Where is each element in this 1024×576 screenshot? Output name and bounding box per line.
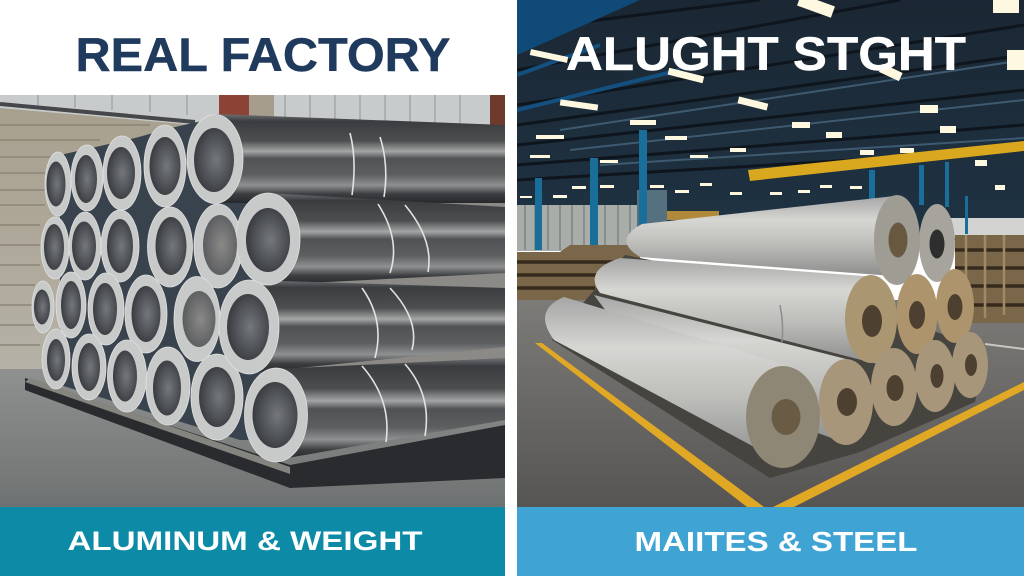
- banner: aluminum and weight: [0, 507, 505, 576]
- columns: [535, 130, 968, 250]
- pipe ends: [32, 114, 308, 462]
- heading: real factory: REAL FACTORY: [76, 28, 450, 81]
- photo: warehouse with rolled metal: [517, 0, 1024, 507]
- pallet base: [25, 378, 505, 488]
- pipe bodies: [215, 114, 505, 460]
- heading: alught stght: ALUGHT STGHT: [566, 27, 966, 80]
- banner: maiites and steel: MAIITES & STEEL: [634, 526, 918, 557]
- panel: alught stght: [517, 0, 1024, 576]
- banner: aluminum and weight: ALUMINUM & WEIGHT: [68, 526, 423, 556]
- dark mass behind pipe ends: [60, 122, 264, 440]
- roll bodies: [626, 196, 894, 276]
- banner: maiites and steel: [517, 507, 1024, 576]
- pallets: [517, 235, 1024, 323]
- floor shadow under rolls: [552, 255, 985, 478]
- ceiling lights: [520, 0, 1024, 198]
- photo: stacked aluminum pipes: [0, 95, 505, 507]
- panel: real factory: [0, 28, 505, 576]
- roll ends: [746, 195, 988, 468]
- floor lines: [535, 343, 1024, 507]
- yellow gantry crane: [748, 141, 1024, 181]
